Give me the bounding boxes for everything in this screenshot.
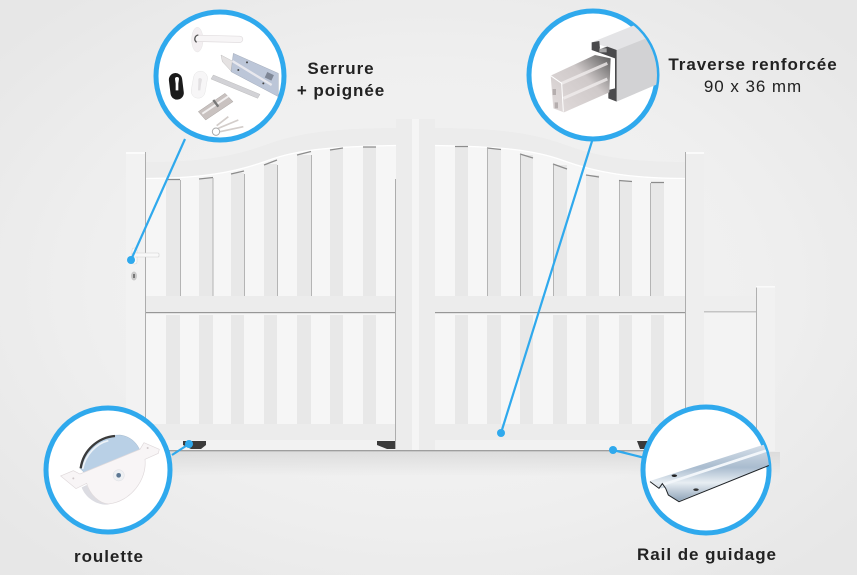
left gate leaf	[145, 128, 396, 450]
top curved rail	[435, 128, 686, 178]
label: crossbar: 90 x 36 mm	[704, 77, 802, 96]
label: lock	[297, 59, 385, 100]
posts	[126, 119, 704, 451]
icon: aluminium profile	[551, 26, 663, 112]
label: crossbar: Traverse renforcée	[668, 55, 838, 74]
gate illustration	[126, 119, 775, 452]
icon: lock parts	[168, 27, 278, 135]
bottom rail	[435, 424, 686, 440]
label: lock: Serrure	[307, 59, 375, 78]
icon: roller wheel	[61, 435, 159, 505]
label: guide rail: Rail de guidage	[637, 545, 777, 564]
connector: roller	[172, 440, 193, 455]
bottom rail	[145, 424, 396, 440]
connector: lock	[127, 139, 185, 264]
label: roller: roulette	[74, 547, 144, 566]
rollers	[183, 441, 650, 449]
callout: guide rail	[643, 407, 778, 533]
middle rail	[145, 296, 396, 312]
top curved rail	[145, 128, 396, 178]
handle	[131, 248, 159, 280]
left leaf slats	[166, 147, 376, 424]
side fence panel	[704, 286, 775, 451]
icon: guide rail profile	[650, 444, 769, 502]
connector: crossbar	[497, 138, 593, 437]
callout: lock and handle	[156, 12, 284, 140]
connector: rail	[609, 446, 645, 458]
label: crossbar	[668, 55, 838, 96]
floor shadow	[120, 452, 780, 476]
callout: roller	[46, 408, 170, 532]
callout: crossbar	[529, 11, 663, 139]
right leaf slats	[455, 147, 664, 424]
middle rail	[435, 296, 686, 312]
label: lock: + poignée	[297, 81, 385, 100]
ground line	[145, 450, 756, 452]
right gate leaf	[435, 128, 686, 450]
